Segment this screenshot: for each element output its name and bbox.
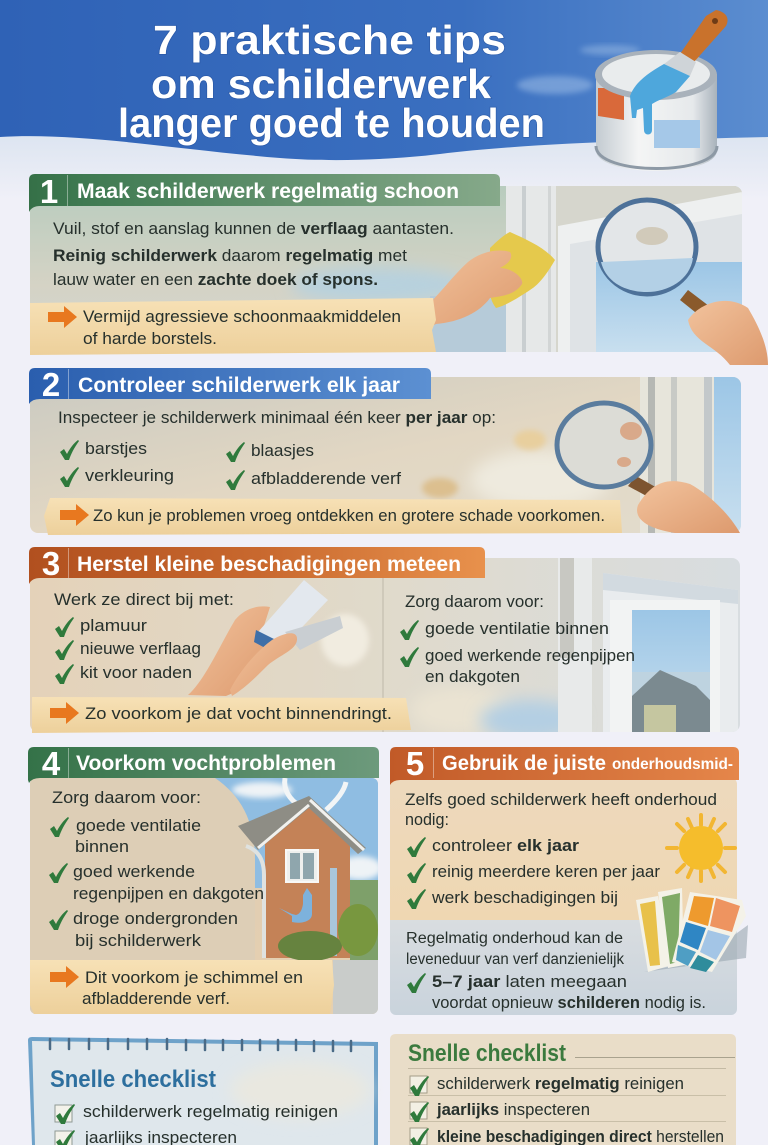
- icon: colour swatches: [636, 888, 748, 972]
- text block: tip 5 lower: voordat opnieuw schilderen nodig is.: [432, 994, 706, 1012]
- checklist: tip 2: blaasjes: [251, 442, 314, 460]
- text block: tip 4: goede ventilatie: [76, 817, 201, 835]
- icon: sun: [667, 815, 735, 881]
- illustration: brick house with downpipe: [238, 778, 378, 961]
- text block: tip 3 right: goede ventilatie binnen: [425, 620, 609, 638]
- illustration: magnifier with hand: [557, 403, 740, 533]
- text block: tip 4: regenpijpen en dakgoten: [73, 885, 264, 903]
- icon: orange arrow: [48, 306, 77, 328]
- callout: tip 2 note: [44, 498, 622, 535]
- heading: tip 5: [390, 745, 739, 785]
- heading: tip 2: Controleer schilderwerk elk jaar: [78, 374, 400, 397]
- text block: tip 1: Reinig schilderwerk daarom regelmatig met: [53, 247, 407, 265]
- text block: tip 5 lower: leveneduur van verf danzienielijk: [406, 951, 624, 968]
- title: om schilderwerk: [151, 61, 491, 107]
- text block: tip 5 upper: nodig:: [405, 811, 449, 829]
- callout: tip 3 note: [32, 697, 411, 733]
- text block: tip 3 left: [54, 591, 234, 684]
- panel: tip 5: [390, 745, 748, 1015]
- illustration: hand with sponge: [414, 232, 555, 328]
- callout: tip 4 note: [30, 960, 334, 1014]
- title: [118, 17, 545, 146]
- heading: tip 3: 3: [42, 545, 60, 582]
- checklist items: paper: jaarlijks inspecteren: [436, 1101, 590, 1119]
- icon: orange arrow: [60, 504, 89, 526]
- heading: paper checklist: Snelle checklist: [408, 1040, 566, 1067]
- panel: tip 2: [29, 366, 741, 535]
- text block: tip 5 lower: Regelmatig onderhoud kan de: [406, 930, 623, 947]
- checklist items: notebook: schilderwerk regelmatig reinigen: [83, 1103, 338, 1121]
- panel: tip 1: [29, 173, 768, 365]
- checklist: tip 2: verkleuring: [85, 467, 174, 485]
- text block: tip 3 right: [400, 593, 635, 686]
- text block: tip 5 lower: 5–7 jaar laten meegaan: [432, 973, 627, 991]
- heading: tip 2: 2: [42, 366, 60, 403]
- text block: tip 3 right: Zorg daarom voor:: [405, 593, 544, 611]
- text block: tip 5 upper: werk beschadigingen bij: [431, 889, 618, 907]
- title: langer goed te houden: [118, 100, 545, 146]
- text block: tip 5 upper: reinig meerdere keren per jaar: [432, 863, 661, 881]
- text block: tip 4: bij schilderwerk: [75, 932, 202, 950]
- checklist: tip 2: afbladderende verf: [251, 470, 401, 488]
- text block: tip 5 upper: Zelfs goed schilderwerk heeft onderhoud: [405, 791, 717, 809]
- heading: tip 1: Maak schilderwerk regelmatig schoon: [77, 180, 459, 203]
- text block: tip 1: Vuil, stof en aanslag kunnen de verflaag aantasten.: [53, 220, 454, 238]
- heading: tip 4: 4: [42, 745, 61, 782]
- text block: tip 3 left: kit voor naden: [80, 664, 192, 682]
- illustration: magnifier over window: [598, 200, 768, 365]
- heading: notebook checklist: Snelle checklist: [50, 1066, 216, 1093]
- callout: tip 2 note: Zo kun je problemen vroeg ontdekken en grotere schade voorkomen.: [93, 507, 605, 525]
- heading: tip 4: Voorkom vochtproblemen: [76, 752, 336, 775]
- text block: tip 5 upper: controleer elk jaar: [432, 837, 580, 855]
- callout: tip 1 note: Vermijd agressieve schoonmaakmiddelen: [83, 308, 401, 326]
- text block: tip 1: lauw water en een zachte doek of spons.: [53, 271, 378, 289]
- illustration: hand with filler tube: [188, 580, 343, 696]
- checklist: tip 2: barstjes: [85, 440, 147, 458]
- text block: tip 5 upper: [405, 791, 717, 909]
- heading: tip 3: [29, 545, 485, 584]
- checklist items: paper: [410, 1075, 724, 1145]
- heading: tip 2: [29, 366, 431, 404]
- heading: tip 5: Gebruik de juiste: [442, 752, 606, 775]
- callout: tip 3 note: Zo voorkom je dat vocht binnendringt.: [85, 705, 392, 723]
- spiral binding: [50, 1039, 351, 1051]
- heading: tip 5: onderhoudsmid-: [612, 756, 733, 773]
- text block: tip 3 left: plamuur: [80, 617, 148, 635]
- callout: tip 4 note: Dit voorkom je schimmel en: [85, 969, 303, 987]
- callout: tip 1 note: [30, 298, 436, 355]
- icon: orange arrow: [50, 966, 79, 988]
- callout: tip 4 note: afbladderende verf.: [82, 990, 230, 1008]
- text block: tip 1: [53, 220, 454, 289]
- heading: tip 5: 5: [406, 745, 424, 782]
- heading: tip 4: [28, 745, 379, 783]
- text block: tip 3 left: nieuwe verflaag: [80, 640, 201, 658]
- text block: tip 4: droge ondergronden: [73, 910, 238, 928]
- text block: tip 3 right: goed werkende regenpijpen: [425, 647, 635, 665]
- panel: tip 4: [28, 745, 382, 1014]
- text block: tip 4: binnen: [75, 838, 129, 856]
- heading: tip 1: [29, 173, 500, 212]
- text block: tip 5 lower: [406, 930, 706, 1012]
- icon: paint can with brush: [595, 10, 728, 171]
- callout: tip 1 note: of harde borstels.: [83, 330, 217, 348]
- panel: notebook checklist: [28, 1037, 378, 1145]
- text block: tip 4: [49, 789, 264, 950]
- text block: tip 4: Zorg daarom voor:: [52, 789, 201, 807]
- panel: paper checklist: [390, 1034, 736, 1145]
- header banner: [0, 0, 768, 200]
- checklist items: notebook: [55, 1103, 338, 1145]
- text block: tip 4: goed werkende: [73, 863, 195, 881]
- panel: tip 3: [29, 545, 740, 740]
- title: 7 praktische tips: [153, 17, 506, 63]
- checklist: tip 2: [60, 440, 401, 490]
- heading: tip 3: Herstel kleine beschadigingen meteen: [77, 553, 461, 576]
- heading: tip 1: 1: [40, 173, 58, 210]
- checklist items: paper: schilderwerk regelmatig reinigen: [437, 1075, 684, 1093]
- text block: tip 3 right: en dakgoten: [425, 668, 520, 686]
- text block: tip 3 left: Werk ze direct bij met:: [54, 591, 234, 609]
- icon: orange arrow: [50, 702, 79, 724]
- text block: tip 2 intro: Inspecteer je schilderwerk minimaal één keer per jaar op:: [58, 409, 496, 427]
